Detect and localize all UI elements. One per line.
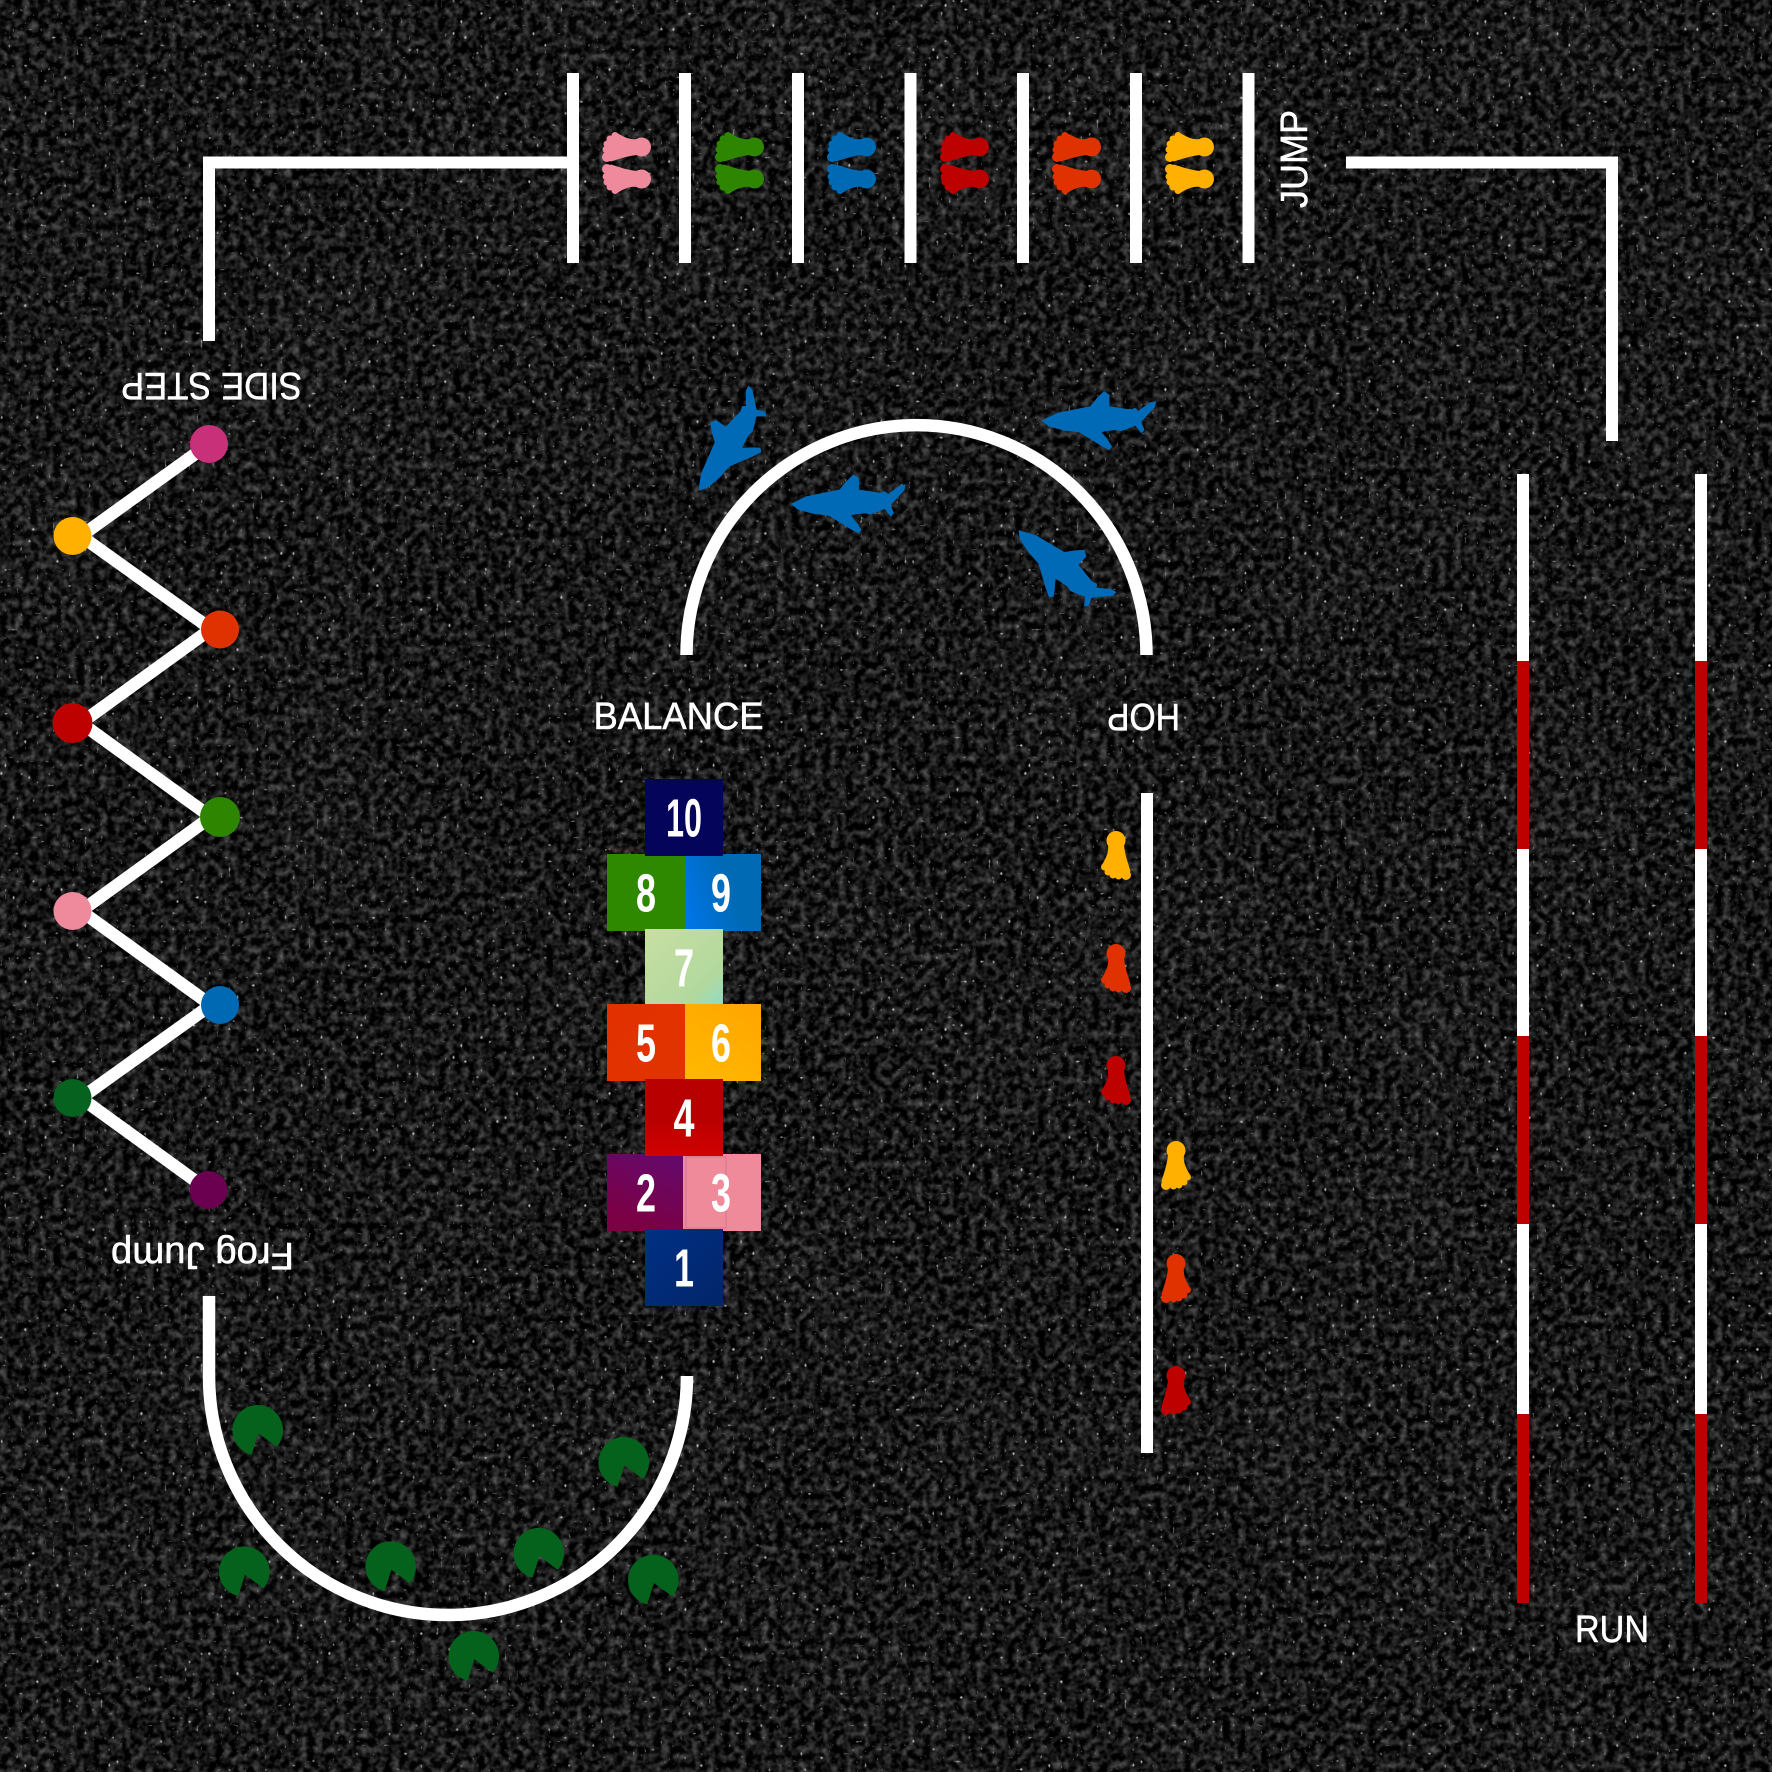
zigzag line: [81, 444, 211, 1190]
square 9: [685, 854, 761, 931]
square 10: [645, 779, 723, 856]
balance arch line: [686, 425, 1146, 655]
right lane bar: [1695, 474, 1707, 1603]
ladder rungs: [567, 73, 1254, 263]
zigzag dots: [52, 425, 240, 1209]
square 7: 7: [674, 938, 694, 998]
footprints: orange-red pair: [1052, 132, 1101, 194]
square 1: [645, 1229, 723, 1306]
label: JUMP: JUMP: [1274, 110, 1316, 208]
square 8: 8: [636, 864, 656, 924]
square 7: [645, 929, 723, 1006]
left lane bar: [1517, 474, 1529, 1603]
panel: side step zigzag: [52, 364, 302, 1276]
panel: hopscotch grid: [607, 779, 761, 1306]
label: SIDE STEP: SIDE STEP: [121, 364, 302, 406]
square 5: [607, 1004, 685, 1081]
square 8: [607, 854, 685, 931]
square 5: 5: [636, 1014, 656, 1074]
label: Frog Jump: Frog Jump: [111, 1234, 294, 1276]
footprints: blue pair: [827, 132, 876, 194]
connector line: side step to jump: [209, 162, 572, 341]
square 3: [683, 1154, 761, 1231]
square 6: [685, 1004, 761, 1081]
right footprints: [1161, 1141, 1191, 1415]
footprints: green pair: [715, 132, 764, 194]
panel: balance arch with sharks: [594, 381, 1180, 738]
U-shaped line: [209, 1296, 687, 1615]
label: HOP: HOP: [1107, 695, 1180, 737]
footprints: pink pair: [602, 132, 651, 194]
panel: jump ladder: [567, 73, 1316, 263]
panel: hop line with footprints: [1101, 793, 1191, 1453]
sharks: [675, 381, 1156, 628]
footprints: dark red pair: [940, 132, 989, 194]
square 6: 6: [711, 1014, 731, 1074]
square 2: 2: [636, 1164, 656, 1224]
square 4: 4: [674, 1088, 694, 1148]
connector line: jump to run: [1346, 162, 1612, 441]
panel: frog jump lily pads: [209, 1296, 687, 1681]
square 9: 9: [711, 864, 731, 924]
footprints: yellow pair: [1165, 132, 1214, 194]
left footprints: [1101, 831, 1131, 1105]
panel: run lanes: [1517, 474, 1707, 1651]
label: RUN: RUN: [1575, 1609, 1649, 1651]
label: BALANCE: BALANCE: [594, 696, 764, 738]
lily pads: [219, 1405, 679, 1681]
square 3: 3: [711, 1164, 731, 1224]
square 2: [607, 1154, 685, 1231]
square 4: [645, 1079, 723, 1156]
hop line: [1141, 793, 1153, 1453]
square 10: 10: [666, 788, 702, 848]
square 1: 1: [674, 1238, 694, 1298]
